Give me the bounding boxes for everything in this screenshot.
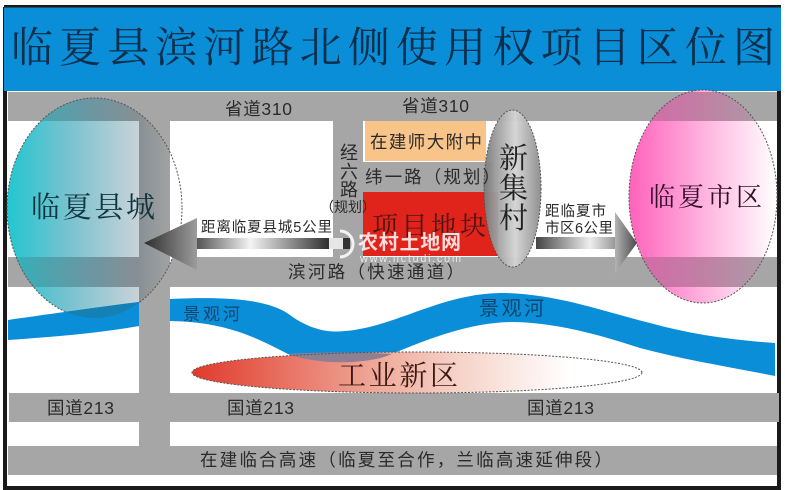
watermark: 农村土地网 <box>358 231 461 254</box>
watermark <box>329 231 461 265</box>
road label: provincial road 310 left: 省道310 <box>225 99 292 119</box>
planned road label: Jingliu: 经 <box>340 143 358 163</box>
distance to city <box>545 203 613 237</box>
school plot <box>365 121 486 161</box>
arrow: to Linxia city <box>536 212 637 273</box>
planned road label: Jingliu <box>340 143 358 200</box>
road label: provincial road 310 right: 省道310 <box>402 96 469 116</box>
city label: 临夏市区 <box>649 183 762 212</box>
river label left: 景观河 <box>183 305 240 324</box>
industrial zone label: 工业新区 <box>338 360 458 392</box>
road network <box>8 92 779 475</box>
village label: 新 <box>499 142 528 175</box>
village label <box>499 142 528 235</box>
title banner <box>4 5 781 91</box>
planned road label: Jingliu: 六 <box>340 162 358 182</box>
industrial zone ellipse <box>192 352 642 393</box>
planned road label: Weiyi: 纬一路（规划） <box>365 167 500 187</box>
village label: 集 <box>499 172 528 205</box>
project plot <box>363 192 498 256</box>
expressway label: 在建临合高速（临夏至合作，兰临高速延伸段） <box>200 450 612 470</box>
title: 临夏县滨河路北侧使用权项目区位图 <box>11 25 775 72</box>
national road labels: 国道213 <box>527 398 594 418</box>
national road labels: 国道213 <box>47 398 114 418</box>
distance to city: 市区6公里 <box>545 220 613 237</box>
village ellipse <box>484 110 541 267</box>
national road labels: 国道213 <box>227 398 294 418</box>
distance to county: 距离临夏县城5公里 <box>201 219 332 236</box>
arrow: to Linxia county <box>144 218 350 270</box>
village label: 村 <box>499 202 528 235</box>
distance to city: 距临夏市 <box>545 203 606 220</box>
river: left section <box>8 302 139 340</box>
school label: 在建师大附中 <box>370 132 482 152</box>
county label: 临夏县城 <box>31 191 155 224</box>
Linxia county ellipse <box>7 92 182 322</box>
river label right: 景观河 <box>479 297 544 320</box>
watermark: www.nctudi.com <box>359 253 461 265</box>
planned road label: Jingliu: 路 <box>340 180 358 200</box>
river: right section <box>170 293 775 376</box>
planned note: （规划） <box>320 199 376 215</box>
Linxia city ellipse <box>629 90 777 303</box>
national road labels <box>47 398 594 418</box>
Binhe road label: 滨河路（快速通道） <box>288 262 464 282</box>
project plot label: 项目地块 <box>372 212 486 241</box>
